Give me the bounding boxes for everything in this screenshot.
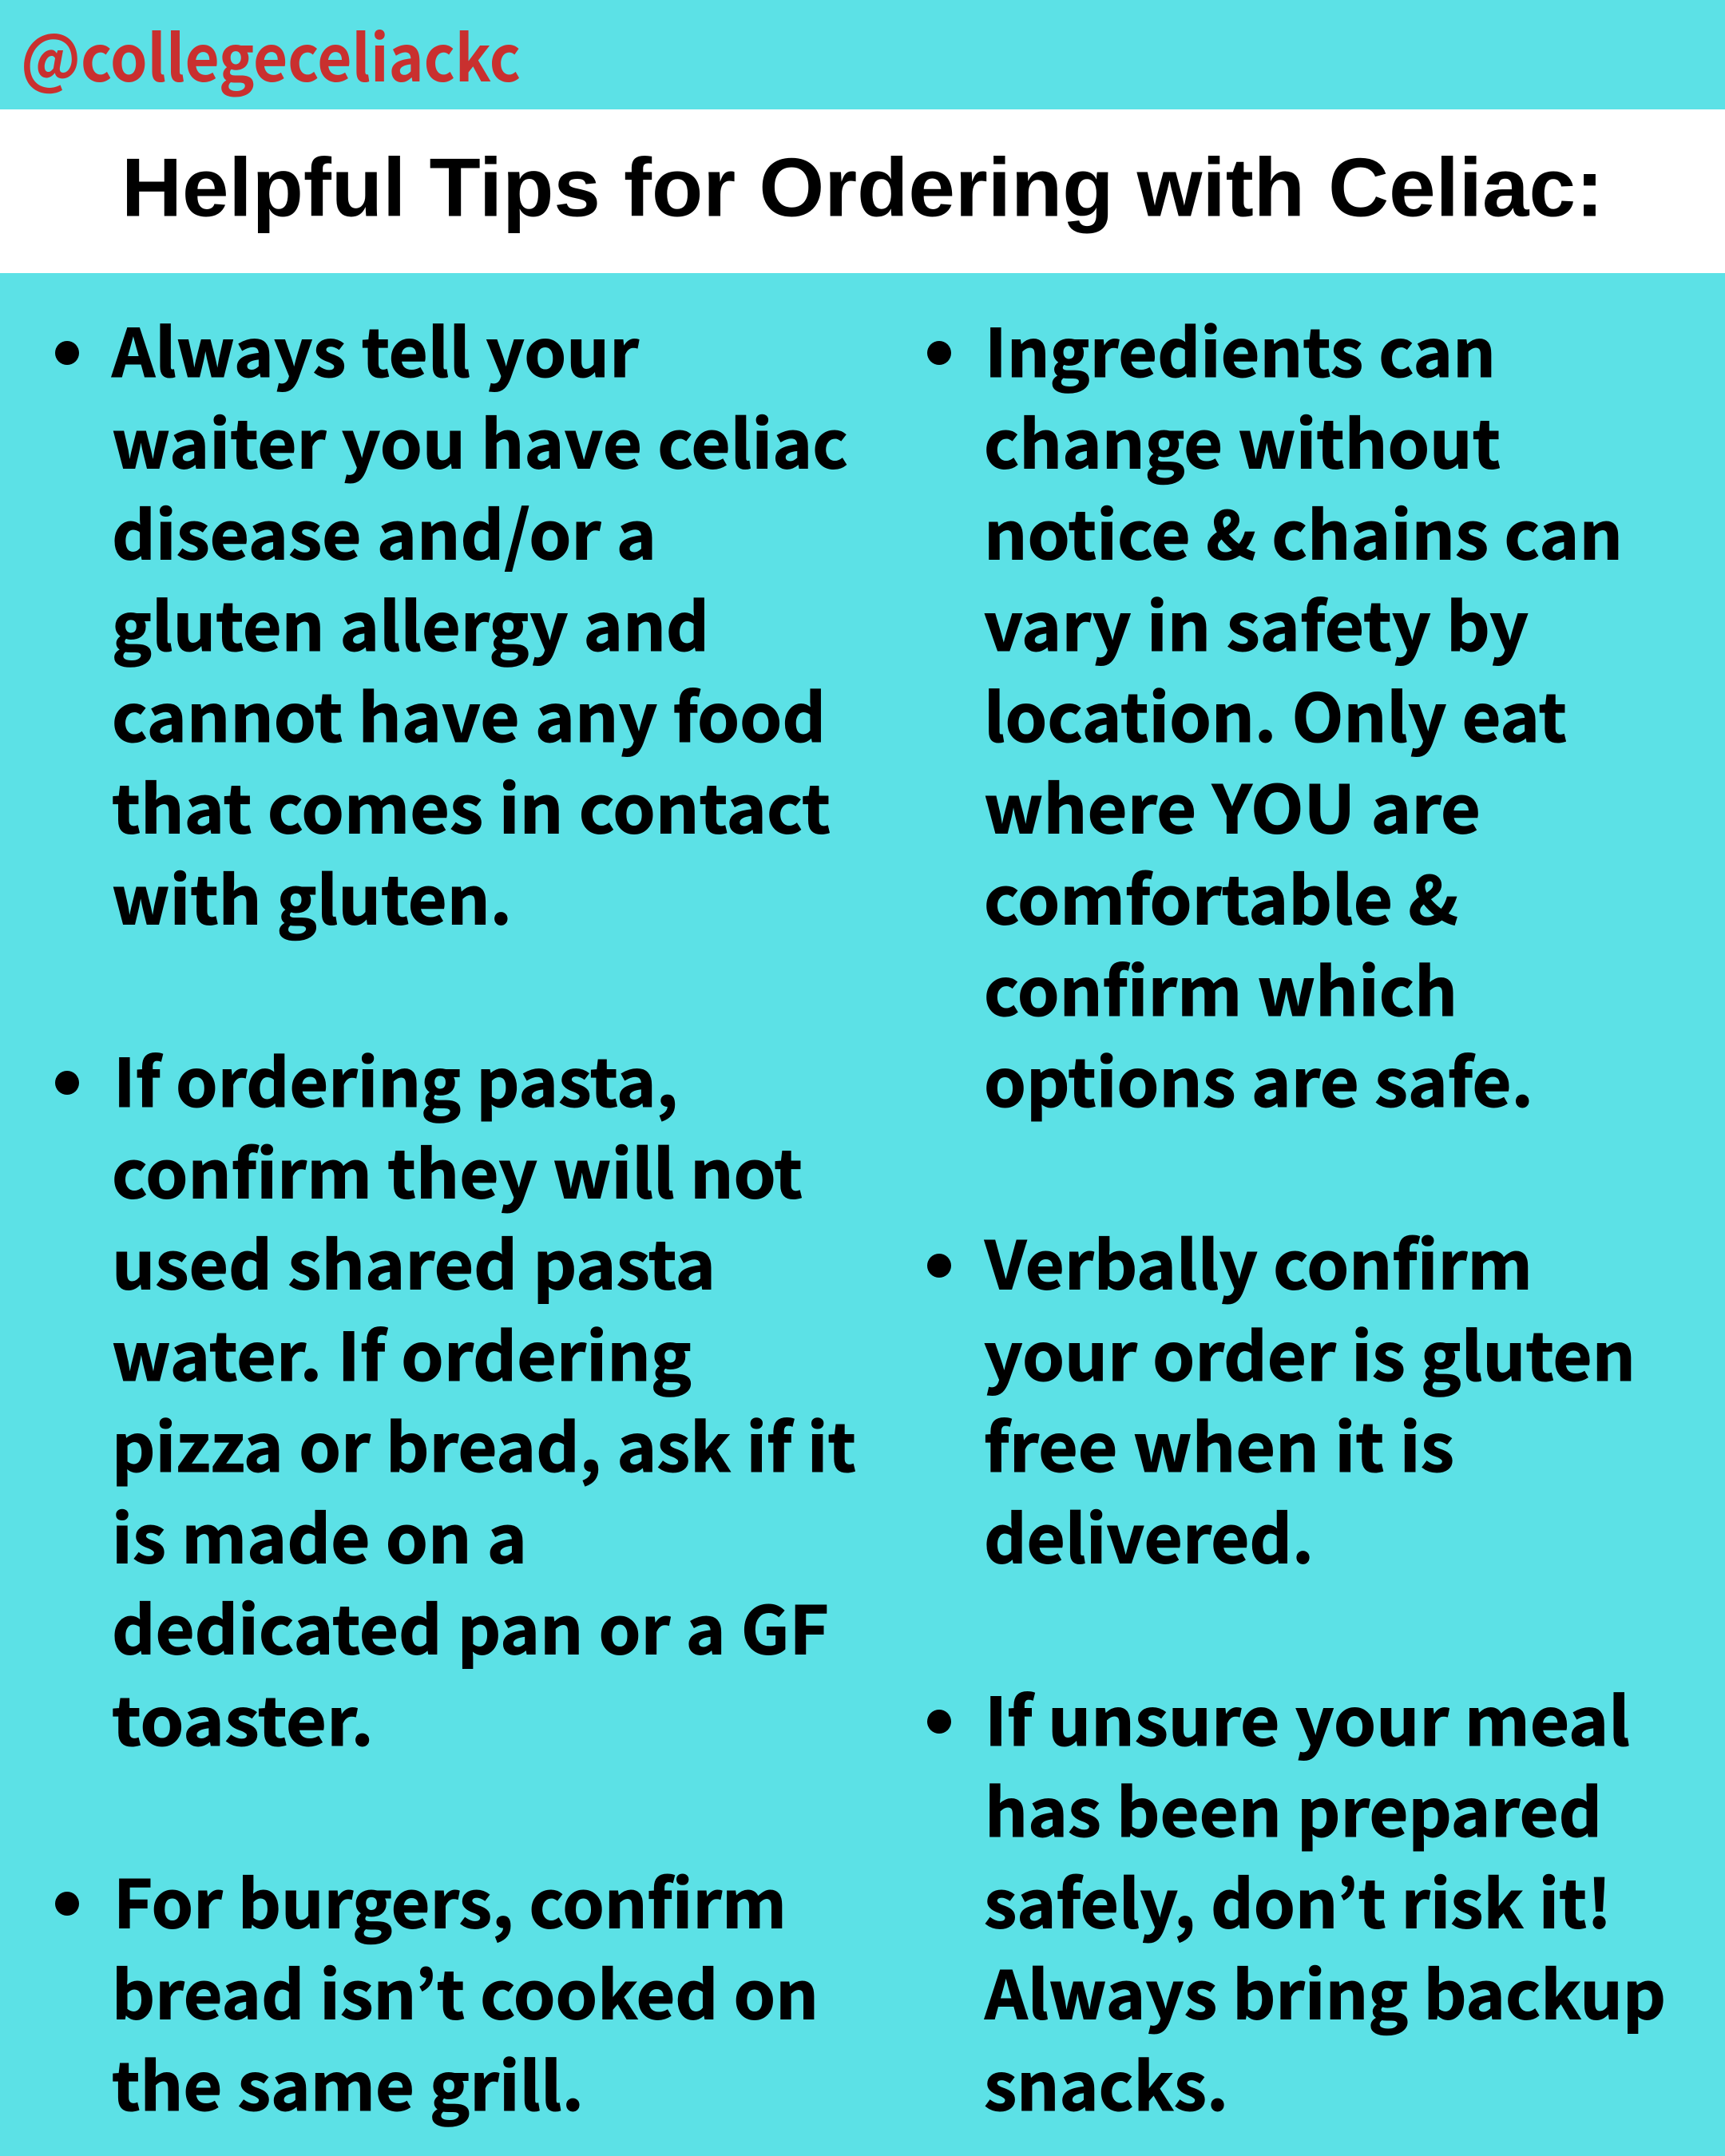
tip text: where YOU are: [984, 756, 1481, 852]
tip text: notice & chains can: [984, 482, 1623, 578]
tip text: your order is gluten: [984, 1304, 1636, 1400]
tip text: safely, don’t risk it!: [984, 1851, 1612, 1947]
tip text: pizza or bread, ask if it: [112, 1395, 856, 1491]
tip text: Verbally confirm: [984, 1212, 1533, 1308]
tip text: vary in safety by: [984, 574, 1529, 670]
tip text: has been prepared: [985, 1760, 1602, 1856]
tip text: free when it is: [984, 1395, 1454, 1491]
tip text: [984, 1669, 1666, 2130]
tip text: [112, 1851, 819, 2130]
tip text: dedicated pan or a GF: [112, 1578, 829, 1674]
tip: tell your waiter: [55, 300, 848, 944]
tip: ingredients can change: [927, 300, 1623, 1126]
tip text: Always bring backup: [984, 1942, 1666, 2038]
bullet: [55, 341, 79, 365]
tip: verbally confirm: [927, 1212, 1636, 1582]
panel: left column tips: [55, 300, 856, 2130]
tip text: is made on a: [112, 1486, 527, 1582]
title band: [0, 109, 1725, 273]
tip text: [984, 300, 1623, 1126]
tip text: [112, 1030, 856, 1765]
tip text: that comes in contact: [112, 756, 831, 852]
tip: burgers: [55, 1851, 819, 2130]
tip text: waiter you have celiac: [112, 391, 848, 487]
tip text: confirm they will not: [112, 1121, 803, 1217]
bullet: [927, 1710, 951, 1734]
tip text: cannot have any food: [112, 665, 826, 761]
social handle: @collegeceliackc: [21, 8, 521, 101]
tip text: bread isn’t cooked on: [112, 1942, 819, 2038]
tip text: toaster.: [112, 1669, 374, 1765]
tip text: Always tell your: [111, 300, 640, 396]
tip text: [111, 300, 848, 944]
panel: right column tips: [927, 300, 1666, 2130]
tip text: the same grill.: [112, 2034, 584, 2130]
tip text: If ordering pasta,: [113, 1030, 678, 1126]
tip text: Ingredients can: [985, 300, 1496, 396]
tip text: gluten allergy and: [112, 574, 709, 670]
tip text: confirm which: [984, 939, 1457, 1035]
tip text: For burgers, confirm: [113, 1851, 787, 1947]
tip text: disease and/or a: [112, 482, 656, 578]
bullet: [55, 1071, 79, 1095]
tip text: options are safe.: [984, 1030, 1533, 1126]
tip text: with gluten.: [112, 848, 512, 944]
title: Helpful Tips for Ordering with Celiac:: [121, 142, 1604, 235]
tip text: change without: [984, 391, 1501, 487]
tip text: comfortable &: [984, 848, 1458, 944]
bullet: [927, 341, 951, 365]
tip text: [984, 1212, 1636, 1582]
bullet: [55, 1892, 79, 1916]
tip text: location. Only eat: [984, 665, 1567, 761]
bullet: [927, 1254, 951, 1278]
tip text: snacks.: [984, 2034, 1228, 2130]
tip text: used shared pasta: [112, 1212, 716, 1308]
tip text: water. If ordering: [112, 1304, 692, 1400]
tip: pasta and pizza: [55, 1030, 856, 1765]
tip text: delivered.: [984, 1486, 1314, 1582]
tip text: If unsure your meal: [985, 1669, 1630, 1765]
tip: if unsure: [927, 1669, 1666, 2130]
